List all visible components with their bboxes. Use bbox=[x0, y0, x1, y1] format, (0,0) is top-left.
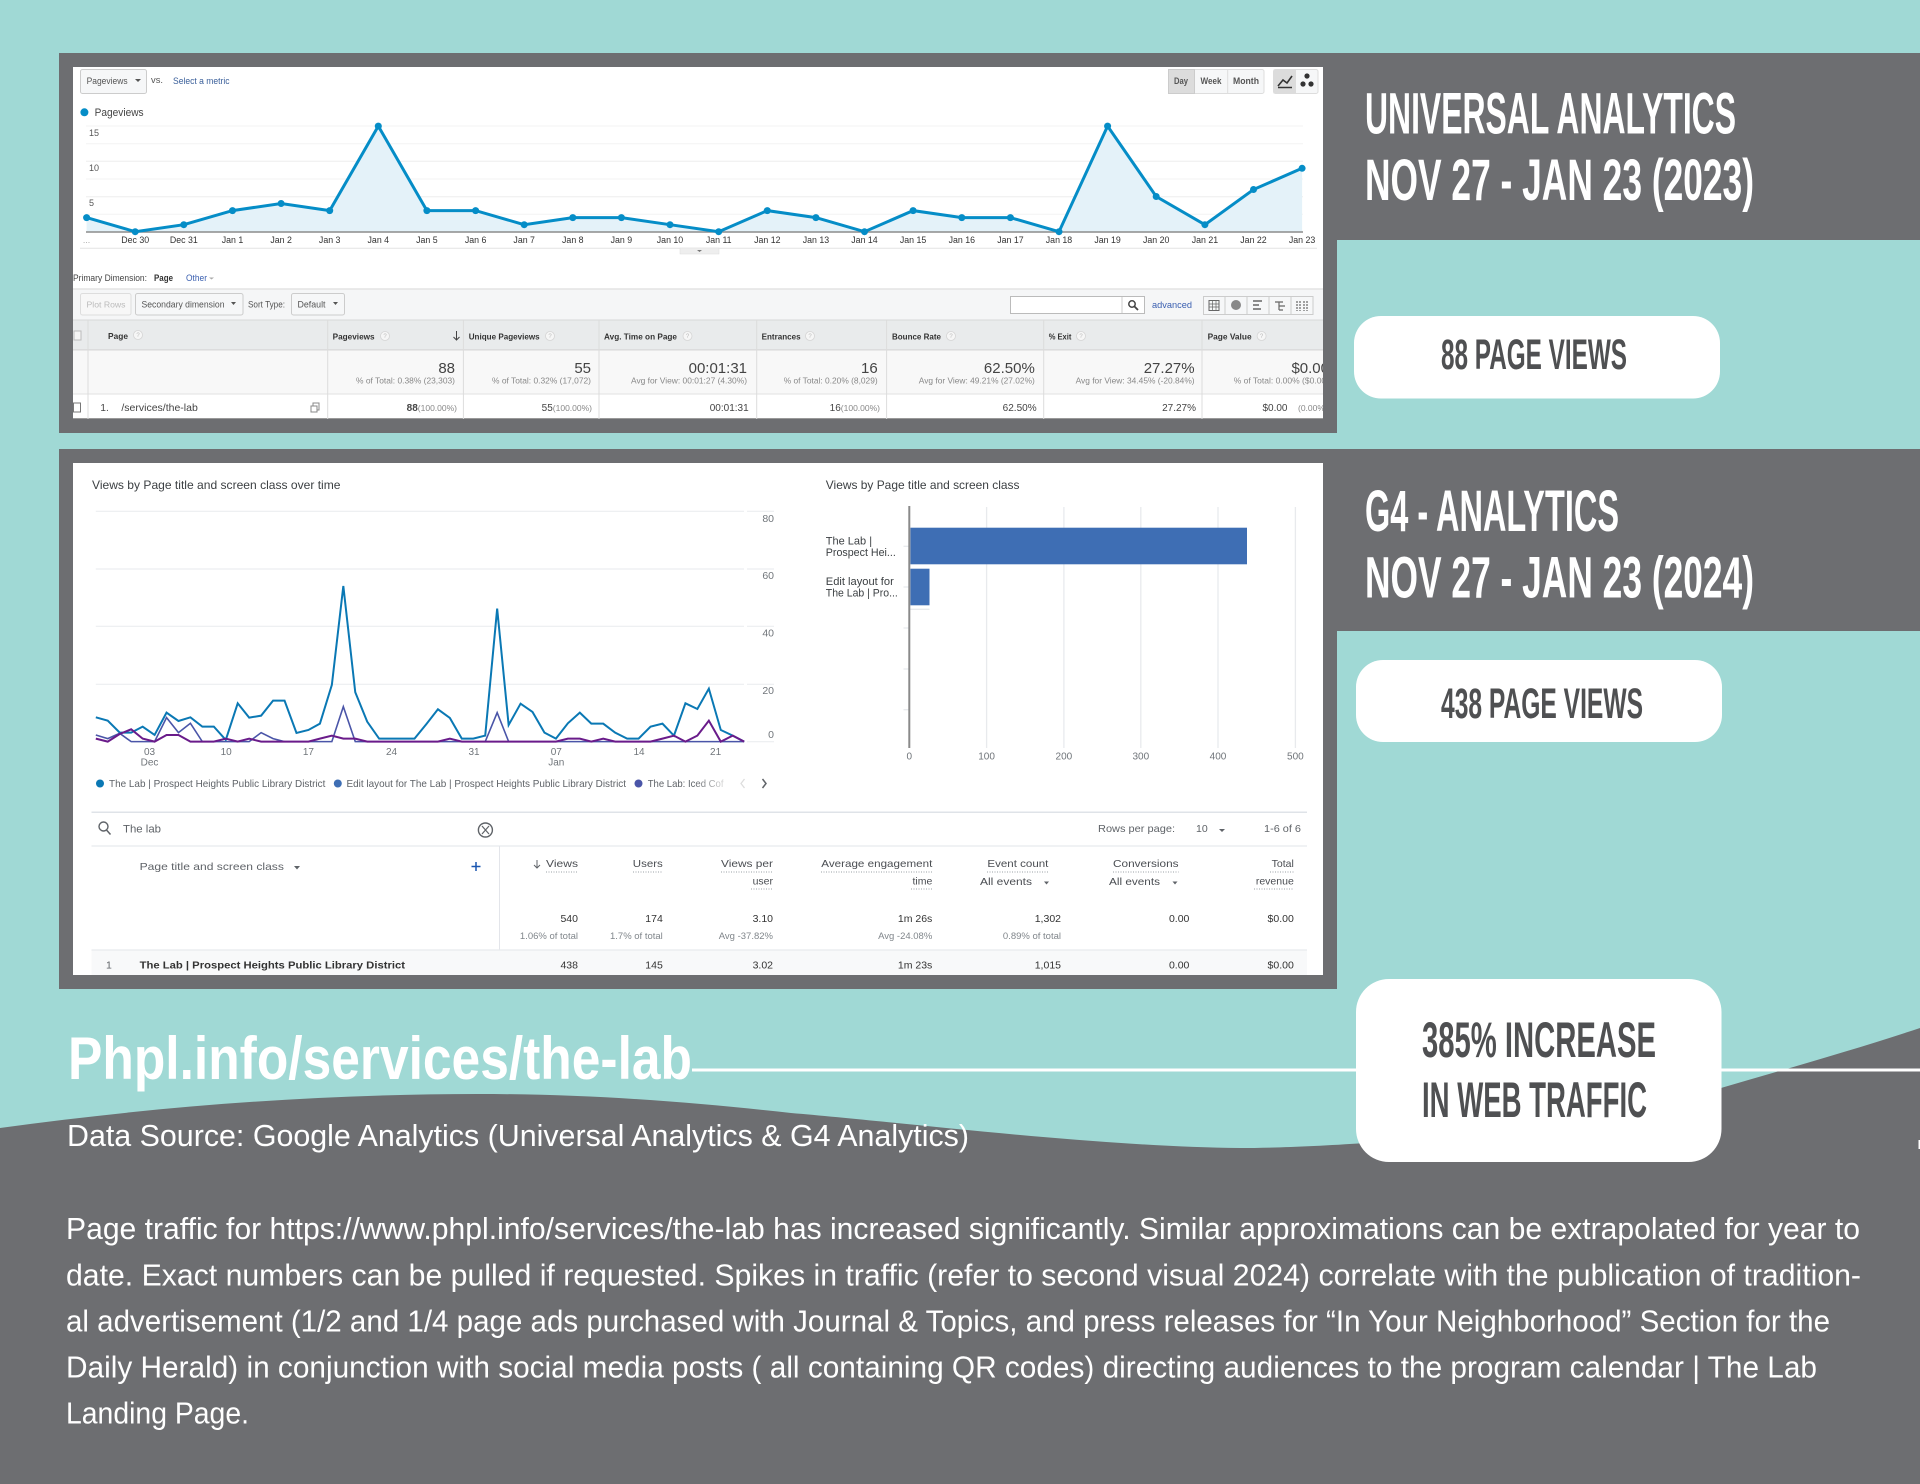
table totals row: % of Total: 0.38% (23,303) bbox=[356, 376, 455, 386]
table column headers: Views bbox=[546, 858, 578, 870]
table data row: 88(100.00%) bbox=[407, 403, 457, 414]
table header: Page bbox=[108, 331, 128, 341]
table header: ? bbox=[808, 334, 812, 340]
bar chart: views by page title: 500 bbox=[1287, 752, 1304, 762]
body paragraph: Page traffic for https://www.phpl.info/services/the-lab has increased significantly. Similar approximations can be extrapolated for year to bbox=[66, 1211, 1860, 1246]
table totals: 3.10 bbox=[753, 913, 773, 925]
data source note: Data Source: Google Analytics (Universal Analytics & G4 Analytics) bbox=[67, 1118, 969, 1153]
line chart: pageviews: 5 bbox=[89, 198, 94, 208]
table totals: 0.89% of total bbox=[1003, 931, 1061, 942]
line chart: pageviews: Jan 23 bbox=[1289, 235, 1315, 245]
line chart: pageviews: Dec 31 bbox=[170, 235, 198, 245]
table totals row: 88 bbox=[438, 360, 455, 377]
bar: the lab bbox=[910, 528, 1247, 564]
line chart: views over time: 0 bbox=[768, 729, 774, 741]
table data row: (0.00%) bbox=[1298, 403, 1328, 413]
pill: 438 page views bbox=[1356, 660, 1722, 742]
table header: Avg. Time on Page bbox=[604, 332, 677, 342]
bar chart: views by page title: 400 bbox=[1210, 752, 1227, 762]
table search bar bbox=[99, 822, 1301, 837]
line chart: pageviews bbox=[80, 123, 1317, 254]
line chart: pageviews: Jan 19 bbox=[1094, 235, 1121, 245]
table data row: 00:01:31 bbox=[710, 403, 749, 414]
line chart: pageviews: 15 bbox=[89, 128, 99, 138]
line chart: views over time: 31 bbox=[468, 747, 480, 758]
line chart: pageviews: Jan 20 bbox=[1143, 235, 1170, 245]
metric selector bbox=[80, 70, 230, 94]
body paragraph bbox=[66, 1211, 1861, 1430]
table first row: 1 bbox=[106, 959, 112, 971]
table totals row: % of Total: 0.32% (17,072) bbox=[492, 376, 591, 386]
table totals: 1m 26s bbox=[898, 913, 932, 925]
bar chart: views by page title: Prospect Hei... bbox=[826, 547, 896, 559]
line chart: pageviews: Jan 4 bbox=[368, 235, 389, 245]
table data row: 55(100.00%) bbox=[542, 403, 592, 414]
line chart: views over time: Jan bbox=[548, 758, 564, 768]
table header: ? bbox=[548, 334, 552, 340]
table column headers: revenue bbox=[1256, 876, 1294, 888]
table column headers: Views per bbox=[721, 858, 774, 870]
callout: 385% increase: IN WEB TRAFFIC bbox=[1422, 1072, 1647, 1128]
primary dimension row: Other bbox=[186, 273, 207, 283]
table first row: $0.00 bbox=[1268, 959, 1294, 971]
table totals row: 00:01:31 bbox=[689, 360, 747, 377]
table header: Unique Pageviews bbox=[469, 332, 540, 342]
line chart: views over time: 21 bbox=[710, 747, 722, 758]
table search bar: Rows per page: bbox=[1098, 823, 1175, 835]
body paragraph: Landing Page. bbox=[66, 1396, 249, 1430]
pill: 88 page views bbox=[1354, 316, 1720, 398]
data table bbox=[92, 812, 1307, 975]
line chart: views over time: 07 bbox=[551, 747, 562, 758]
day week month toggle bbox=[1168, 70, 1264, 94]
metric selector: Select a metric bbox=[173, 76, 230, 86]
table totals row: $0.00 bbox=[1291, 360, 1329, 377]
table toolbar: Plot Rows bbox=[86, 300, 126, 310]
table header: ? bbox=[1260, 334, 1264, 340]
bar chart: views by page title: 0 bbox=[907, 752, 913, 762]
line chart: pageviews: Jan 11 bbox=[706, 235, 732, 245]
table header: Bounce Rate bbox=[892, 332, 941, 342]
table first row: 1m 23s bbox=[898, 959, 932, 971]
table header: Pageviews bbox=[333, 332, 375, 342]
table column headers: Page title and screen class bbox=[140, 861, 284, 873]
table search bar: 1-6 of 6 bbox=[1264, 823, 1301, 835]
table totals: 540 bbox=[560, 913, 578, 925]
line chart: pageviews: Jan 18 bbox=[1046, 235, 1072, 245]
line chart: pageviews: Jan 16 bbox=[949, 235, 975, 245]
line chart: pageviews: Jan 9 bbox=[611, 235, 632, 245]
table header: ? bbox=[383, 334, 387, 340]
table data row bbox=[73, 394, 1328, 418]
bar chart: views by page title bbox=[826, 478, 1304, 762]
line chart: views over time: 20 bbox=[762, 685, 774, 697]
bar chart: views by page title: 300 bbox=[1132, 752, 1150, 762]
table totals row: % of Total: 0.20% (8,029) bbox=[784, 376, 878, 386]
table first row: 1,015 bbox=[1035, 959, 1061, 971]
line chart: views over time: 24 bbox=[386, 747, 397, 758]
bar chart: views by page title: 200 bbox=[1056, 752, 1073, 762]
day week month toggle: Week bbox=[1200, 76, 1222, 86]
line chart: pageviews: Jan 1 bbox=[222, 235, 243, 245]
screenshot: G4 analytics report bbox=[73, 463, 1323, 975]
body paragraph: Daily Herald) in conjunction with social media posts ( all containing QR codes) directing audiences to the program calendar | The Lab bbox=[66, 1350, 1817, 1384]
table column headers: All events bbox=[1109, 876, 1160, 888]
table toolbar: Secondary dimension bbox=[142, 300, 224, 310]
line chart legend: The Lab | Prospect Heights Public Library District bbox=[109, 778, 325, 790]
line chart: pageviews: Jan 17 bbox=[997, 235, 1024, 245]
line chart: views over time: 03 bbox=[144, 747, 155, 758]
bar chart: views by page title: Edit layout for bbox=[826, 576, 894, 588]
table totals: 1.7% of total bbox=[610, 931, 663, 942]
table header: ? bbox=[949, 334, 953, 340]
table data row: 1. bbox=[100, 403, 109, 414]
line chart: pageviews: Jan 13 bbox=[803, 235, 829, 245]
table data row: $0.00 bbox=[1262, 403, 1288, 414]
table totals: 174 bbox=[645, 913, 663, 925]
primary dimension row: Primary Dimension: bbox=[73, 273, 147, 283]
callout: 385% increase: 385% INCREASE bbox=[1422, 1012, 1656, 1068]
metric selector: Pageviews bbox=[87, 76, 128, 86]
table header bbox=[73, 320, 1323, 350]
table totals row: Avg for View: 49.21% (27.02%) bbox=[919, 376, 1035, 386]
line chart title: Views by Page title and screen class over time bbox=[92, 478, 341, 492]
metric selector: vs. bbox=[151, 75, 163, 85]
table data row: 16(100.00%) bbox=[830, 403, 880, 414]
table first row: 145 bbox=[645, 959, 663, 971]
table totals row: 16 bbox=[861, 360, 878, 377]
table first row: The Lab | Prospect Heights Public Library District bbox=[140, 959, 406, 971]
table totals row: Avg for View: 34.45% (-20.84%) bbox=[1076, 376, 1195, 386]
line chart legend bbox=[96, 778, 767, 789]
table totals: Avg -37.82% bbox=[719, 931, 774, 942]
table toolbar bbox=[73, 289, 1323, 320]
line chart: pageviews: ... bbox=[83, 235, 90, 245]
line chart: pageviews: Jan 15 bbox=[900, 235, 926, 245]
table totals bbox=[520, 913, 1294, 942]
table totals row: 55 bbox=[574, 360, 591, 377]
bar: edit layout bbox=[910, 569, 930, 605]
line chart: pageviews: Jan 6 bbox=[465, 235, 486, 245]
line chart: pageviews: Jan 12 bbox=[754, 235, 781, 245]
line chart: pageviews: Jan 2 bbox=[270, 235, 292, 245]
table header: Entrances bbox=[762, 332, 801, 342]
table totals row: 27.27% bbox=[1144, 360, 1195, 377]
chart legend: Pageviews bbox=[95, 107, 144, 119]
table column headers: Average engagement bbox=[821, 858, 932, 870]
line chart: pageviews: Jan 10 bbox=[657, 235, 683, 245]
line chart: views over time: 14 bbox=[633, 747, 645, 758]
line chart: pageviews: Jan 7 bbox=[513, 235, 535, 245]
line chart: views over time: 60 bbox=[762, 570, 774, 582]
line chart: pageviews: Jan 14 bbox=[851, 235, 878, 245]
table header: ? bbox=[136, 333, 140, 339]
table totals row: 62.50% bbox=[984, 360, 1035, 377]
panel: G4 analytics band bbox=[59, 449, 1920, 989]
chart legend bbox=[80, 108, 144, 118]
table data row: 62.50% bbox=[1003, 403, 1037, 414]
line chart: views over time bbox=[92, 478, 774, 790]
primary dimension row: Page bbox=[154, 273, 173, 283]
pill: 88 page views: 88 PAGE VIEWS bbox=[1441, 331, 1627, 379]
line chart: pageviews: Jan 5 bbox=[416, 235, 438, 245]
panel: universal analytics band bbox=[59, 53, 1920, 433]
line chart: views over time: 10 bbox=[221, 747, 232, 758]
day week month toggle: Month bbox=[1233, 76, 1259, 86]
line chart: pageviews: Jan 8 bbox=[562, 235, 584, 245]
table column headers: All events bbox=[980, 876, 1032, 888]
callout: 385% increase bbox=[1356, 979, 1722, 1162]
line chart: views over time: 80 bbox=[762, 513, 774, 525]
table search bar: The lab bbox=[123, 824, 161, 836]
table column headers: user bbox=[753, 876, 773, 888]
line chart: pageviews: Jan 22 bbox=[1240, 235, 1267, 245]
bar chart: views by page title: The Lab | Pro... bbox=[826, 588, 898, 600]
chart type icons bbox=[1274, 70, 1318, 94]
line chart: pageviews: Jan 3 bbox=[319, 235, 341, 245]
primary dimension row bbox=[74, 274, 214, 283]
table totals row bbox=[73, 350, 1323, 385]
table column headers bbox=[140, 858, 1294, 889]
table column headers: time bbox=[912, 876, 932, 888]
screenshot: universal analytics report bbox=[73, 67, 1329, 419]
table header: % Exit bbox=[1049, 332, 1072, 342]
G4 analytics heading bbox=[1365, 479, 1754, 610]
table totals: $0.00 bbox=[1268, 913, 1294, 925]
url title: Phpl.info/services/the-lab bbox=[68, 1025, 692, 1092]
table header: ? bbox=[686, 334, 690, 340]
table totals row: Avg for View: 00:01:27 (4.30%) bbox=[631, 376, 747, 386]
line chart: views over time: Dec bbox=[141, 758, 158, 768]
table totals: 0.00 bbox=[1169, 913, 1190, 925]
background wave bbox=[0, 1028, 1920, 1484]
table column headers: Conversions bbox=[1113, 858, 1179, 870]
table header: ? bbox=[1079, 334, 1083, 340]
table data row: /services/the-lab bbox=[121, 403, 198, 414]
table totals: 1.06% of total bbox=[520, 931, 578, 942]
table first row: 0.00 bbox=[1169, 959, 1190, 971]
line chart: views over time: 40 bbox=[762, 628, 774, 640]
table totals row: % of Total: 0.00% ($0.00) bbox=[1234, 376, 1329, 386]
table first row: 438 bbox=[560, 959, 578, 971]
body paragraph: al advertisement (1/2 and 1/4 page ads purchased with Journal & Topics, and press releases for “In Your Neighborhood” Section for the bbox=[66, 1304, 1830, 1338]
line chart: views over time: 17 bbox=[303, 747, 314, 758]
line chart legend: The Lab: Iced Cof bbox=[648, 778, 724, 790]
table data row: 27.27% bbox=[1162, 403, 1196, 414]
line chart: pageviews: 10 bbox=[89, 163, 99, 173]
table totals: 1,302 bbox=[1035, 913, 1061, 925]
line chart legend: Edit layout for The Lab | Prospect Heights Public Library District bbox=[346, 778, 626, 790]
line chart: pageviews: Dec 30 bbox=[121, 235, 149, 245]
line chart: pageviews: Jan 21 bbox=[1192, 235, 1218, 245]
G4 analytics heading: G4 - ANALYTICS bbox=[1365, 479, 1619, 544]
table totals: Avg -24.08% bbox=[878, 931, 933, 942]
day week month toggle: Day bbox=[1174, 76, 1188, 86]
table toolbar: Default bbox=[298, 300, 326, 310]
table toolbar: Sort Type: bbox=[248, 300, 285, 310]
bar chart title: Views by Page title and screen class bbox=[826, 478, 1020, 492]
bar chart: views by page title: 100 bbox=[978, 752, 995, 762]
body paragraph: date. Exact numbers can be pulled if requested. Spikes in traffic (refer to second visual 2024) correlate with the publication of tradition- bbox=[66, 1258, 1861, 1292]
table toolbar: advanced bbox=[1152, 300, 1192, 310]
pill: 438 page views: 438 PAGE VIEWS bbox=[1441, 680, 1643, 728]
universal analytics heading bbox=[1365, 82, 1754, 213]
table column headers: Total bbox=[1272, 858, 1294, 870]
table column headers: Users bbox=[633, 858, 663, 870]
divider line bbox=[692, 1068, 1920, 1072]
bar chart: views by page title: The Lab | bbox=[826, 536, 872, 548]
table first row: 3.02 bbox=[753, 959, 773, 971]
table first row bbox=[92, 950, 1307, 975]
table header: Page Value bbox=[1208, 332, 1252, 342]
table column headers: Event count bbox=[987, 858, 1048, 870]
table search bar: 10 bbox=[1196, 823, 1208, 835]
